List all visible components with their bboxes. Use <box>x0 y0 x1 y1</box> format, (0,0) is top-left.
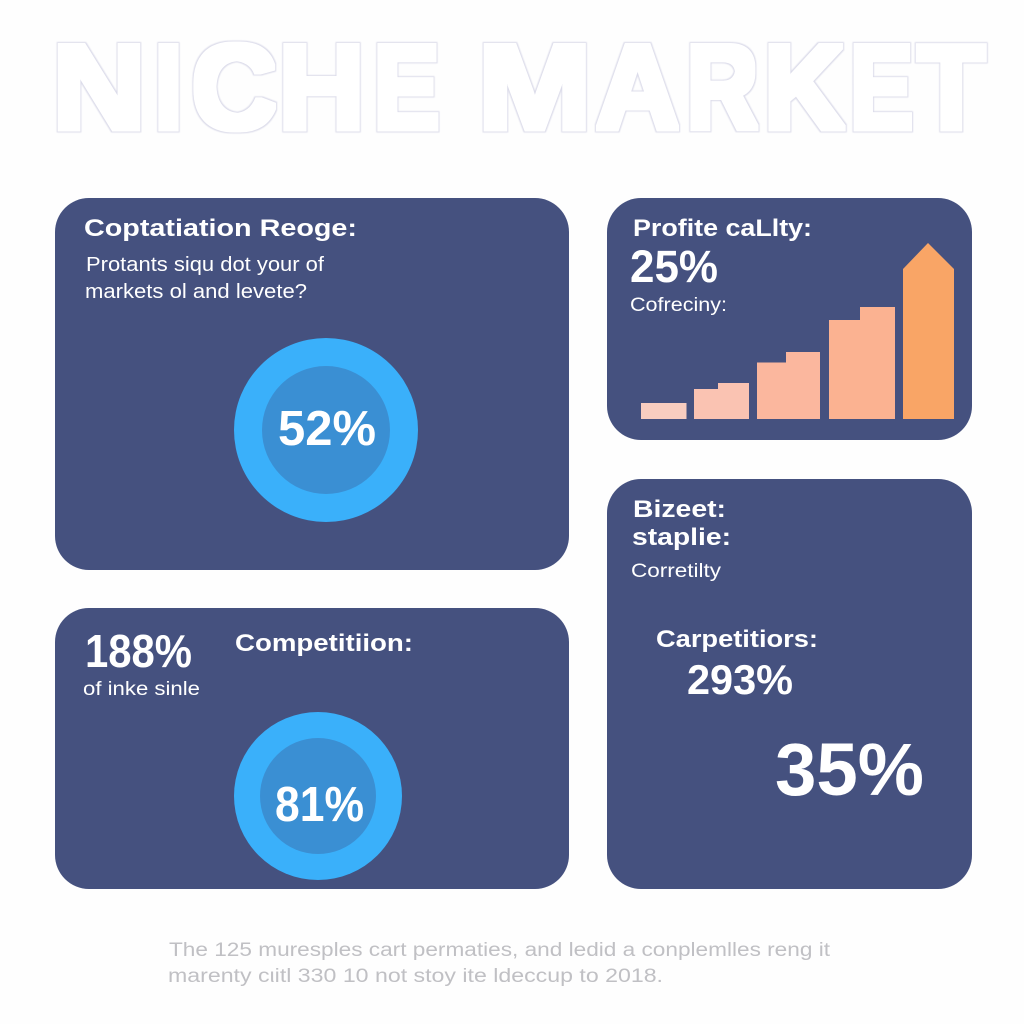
subheading: Carpetitiors: <box>656 626 818 653</box>
label: of inke sinle <box>83 679 200 700</box>
title: R <box>687 20 758 154</box>
label: Cofreciny: <box>630 295 727 316</box>
title: H <box>278 20 365 154</box>
title: N <box>52 20 146 154</box>
footnote: marenty cιitl 330 10 not stoy ite ldeccup to 2018. <box>168 966 663 987</box>
title: C <box>192 20 276 154</box>
footnote <box>168 940 831 987</box>
title: E <box>850 20 913 154</box>
label: Corretilty <box>631 561 722 582</box>
title <box>52 20 985 154</box>
panel: profit <box>607 198 972 440</box>
stat 188%: 188% <box>85 625 192 677</box>
body text: markets ol and levete? <box>85 281 307 303</box>
title: M <box>477 20 592 154</box>
body text: Protants siqu dot your of <box>86 254 324 276</box>
footnote: The 125 muresples cart permaties, and ledid a conplemlles reng it <box>169 940 831 961</box>
title: I <box>155 20 182 154</box>
panel: competition <box>55 608 569 889</box>
stat 35%: 35% <box>775 728 924 811</box>
title: E <box>374 20 439 154</box>
heading: Competitiion: <box>235 630 413 657</box>
title: A <box>596 20 679 154</box>
title: K <box>764 20 844 154</box>
body text <box>85 254 324 303</box>
bar chart <box>641 243 954 419</box>
title: T <box>918 20 985 154</box>
ring chart 52%: 52% <box>278 402 376 456</box>
stat 25%: 25% <box>630 241 718 292</box>
heading: staplie: <box>632 524 731 551</box>
heading: Coptatiation Reoge: <box>84 215 357 242</box>
heading: Profite caLlty: <box>633 215 812 242</box>
stat 293%: 293% <box>687 656 793 703</box>
ring chart 52% <box>234 338 418 522</box>
heading: Bizeet: <box>633 496 726 523</box>
ring chart 81% <box>234 712 402 880</box>
panel: bottom right <box>607 479 972 889</box>
panel: top left <box>55 198 569 570</box>
ring chart 81%: 81% <box>275 778 364 832</box>
